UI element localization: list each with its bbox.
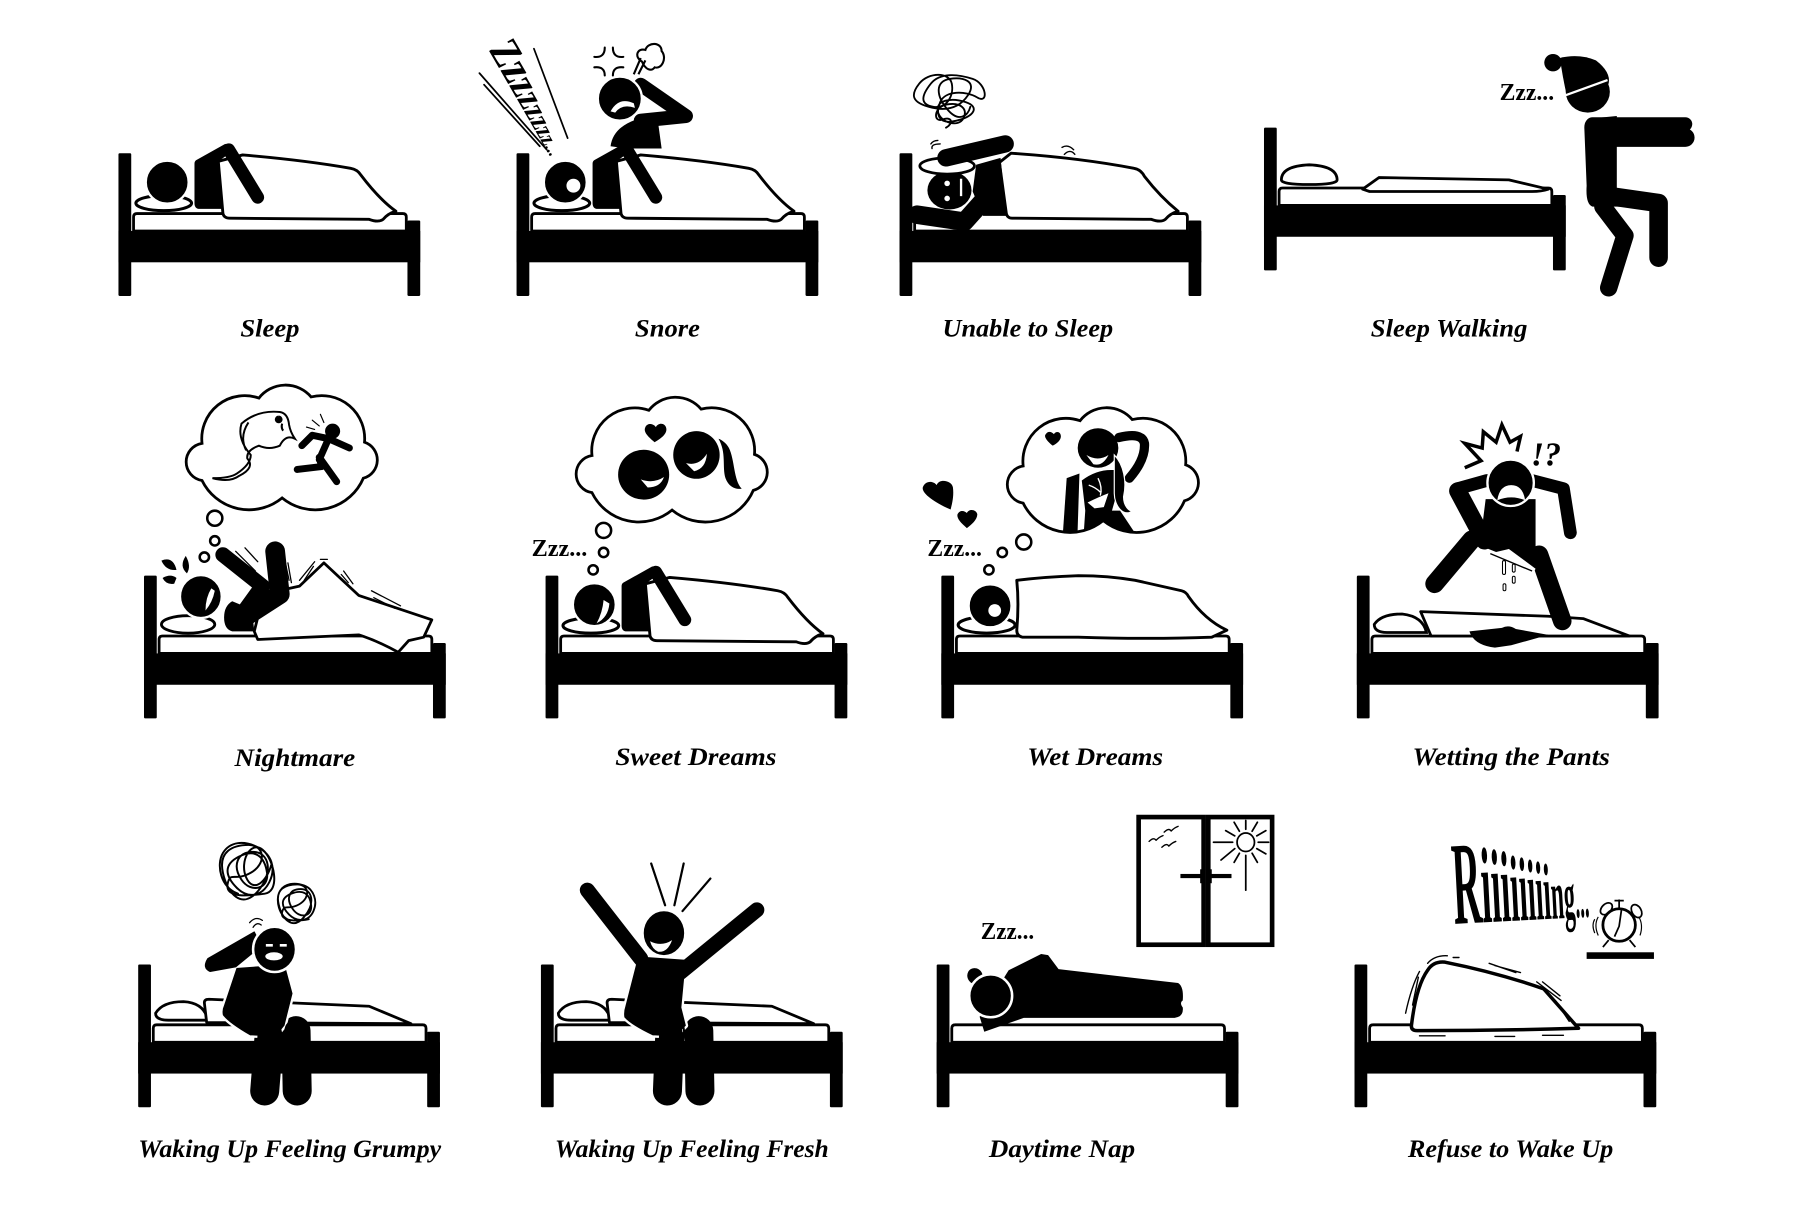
bed	[118, 153, 420, 296]
panel: unable to sleep	[900, 75, 1201, 343]
sweat drops	[161, 556, 189, 584]
dream cloud	[576, 397, 767, 522]
motion marks	[250, 919, 262, 927]
zzz: Zzz...	[532, 535, 587, 562]
pillow	[558, 1002, 611, 1020]
panel: waking up feeling grumpy	[138, 843, 442, 1163]
exclamation: !?	[1531, 436, 1561, 473]
thought bubbles	[984, 534, 1031, 575]
dream cloud	[186, 385, 377, 510]
folded blanket	[1363, 178, 1548, 192]
zzz: Zzz...	[981, 918, 1034, 945]
dream woman	[1062, 428, 1145, 545]
thrashing figure	[180, 551, 280, 631]
excitement lines	[651, 863, 710, 911]
bed	[541, 964, 843, 1107]
bed	[144, 576, 446, 718]
window	[1139, 817, 1272, 945]
anger mark	[594, 48, 623, 75]
label: wet dreams: Wet Dreams	[1027, 742, 1163, 771]
small heart	[1045, 432, 1061, 446]
label: waking up feeling fresh: Waking Up Feeling Fresh	[555, 1134, 829, 1163]
mouth	[988, 604, 1001, 617]
ghost eyes	[276, 417, 283, 431]
running man	[297, 414, 349, 482]
annoyed partner	[598, 77, 686, 149]
panel: sleep walking	[1264, 54, 1685, 343]
stress scribble	[914, 75, 985, 128]
alarm text: Riiiiiiiing...	[1449, 812, 1591, 951]
dream couple	[618, 431, 742, 500]
bed	[1264, 128, 1566, 270]
label: sleep: Sleep	[240, 314, 300, 343]
empty pillow	[1281, 165, 1337, 185]
panel: wetting the pants	[1357, 425, 1659, 771]
mouth	[566, 179, 580, 193]
speed lines	[479, 49, 568, 150]
pillow	[958, 617, 1015, 633]
wet stain	[1469, 626, 1548, 648]
tossed blanket	[254, 563, 432, 652]
panel: sleep	[118, 144, 420, 343]
alarm clock	[1593, 899, 1644, 947]
snoring figure	[534, 144, 794, 221]
bed	[900, 153, 1201, 296]
panel: wet dreams	[923, 408, 1243, 771]
panel: daytime nap	[937, 817, 1272, 1163]
blanket	[607, 999, 814, 1024]
restless figure	[917, 144, 1006, 222]
pillow	[161, 616, 215, 633]
smile	[597, 600, 609, 623]
sleeping figure	[563, 566, 823, 644]
shelf	[1587, 952, 1654, 959]
sleeping figure	[136, 144, 396, 221]
ghost	[212, 412, 295, 480]
bed	[546, 576, 847, 718]
label: wetting the pants: Wetting the Pants	[1413, 742, 1610, 771]
pillow	[156, 1002, 208, 1020]
blanket mound	[1411, 962, 1579, 1031]
label: sleep walking: Sleep Walking	[1371, 314, 1528, 343]
sun	[1214, 821, 1269, 890]
label: daytime nap: Daytime Nap	[988, 1134, 1135, 1163]
thought bubbles	[200, 511, 222, 562]
birds	[1149, 826, 1178, 847]
large stress scribble	[220, 843, 274, 899]
panel: refuse to wake up	[1355, 812, 1656, 1163]
bed	[1355, 964, 1656, 1107]
bed	[941, 576, 1243, 718]
label: snore: Snore	[635, 314, 700, 343]
pillow	[1374, 614, 1426, 633]
happy figure	[587, 890, 757, 1091]
steam puff	[634, 44, 664, 74]
hearts	[923, 481, 977, 528]
thought bubbles	[589, 523, 611, 575]
snore text: Zzzzzzzz...	[479, 30, 585, 162]
sleeping head	[969, 584, 1012, 627]
shaking lines	[1406, 956, 1569, 1036]
panel: snore	[479, 30, 818, 343]
motion marks	[931, 140, 1075, 154]
label: nightmare: Nightmare	[233, 743, 355, 772]
shock burst	[1465, 425, 1520, 468]
bed	[937, 964, 1238, 1107]
blanket	[204, 999, 411, 1024]
walking figure	[1544, 54, 1685, 288]
motion lines	[236, 548, 400, 608]
small stress scribble	[278, 884, 315, 923]
blanket	[1421, 612, 1630, 636]
label: waking up feeling grumpy: Waking Up Feeling Grumpy	[138, 1134, 442, 1163]
panicking figure	[1435, 460, 1570, 621]
blanket	[1017, 576, 1227, 638]
dream cloud	[1007, 408, 1198, 532]
panel: nightmare	[144, 385, 446, 772]
bed	[1357, 576, 1659, 718]
zzz: Zzz...	[1500, 79, 1554, 106]
heart	[645, 424, 666, 442]
panel: sweet dreams	[532, 397, 847, 771]
panel: waking up feeling fresh	[541, 863, 843, 1163]
bed	[138, 964, 440, 1107]
grumpy figure	[205, 927, 297, 1091]
napping figure	[964, 954, 1183, 1032]
blanket	[999, 153, 1178, 221]
zzz: Zzz...	[927, 535, 982, 562]
label: refuse to wake up: Refuse to Wake Up	[1407, 1134, 1613, 1163]
label: sweet dreams: Sweet Dreams	[615, 742, 777, 771]
bed	[517, 153, 818, 296]
label: unable to sleep: Unable to Sleep	[942, 314, 1113, 343]
